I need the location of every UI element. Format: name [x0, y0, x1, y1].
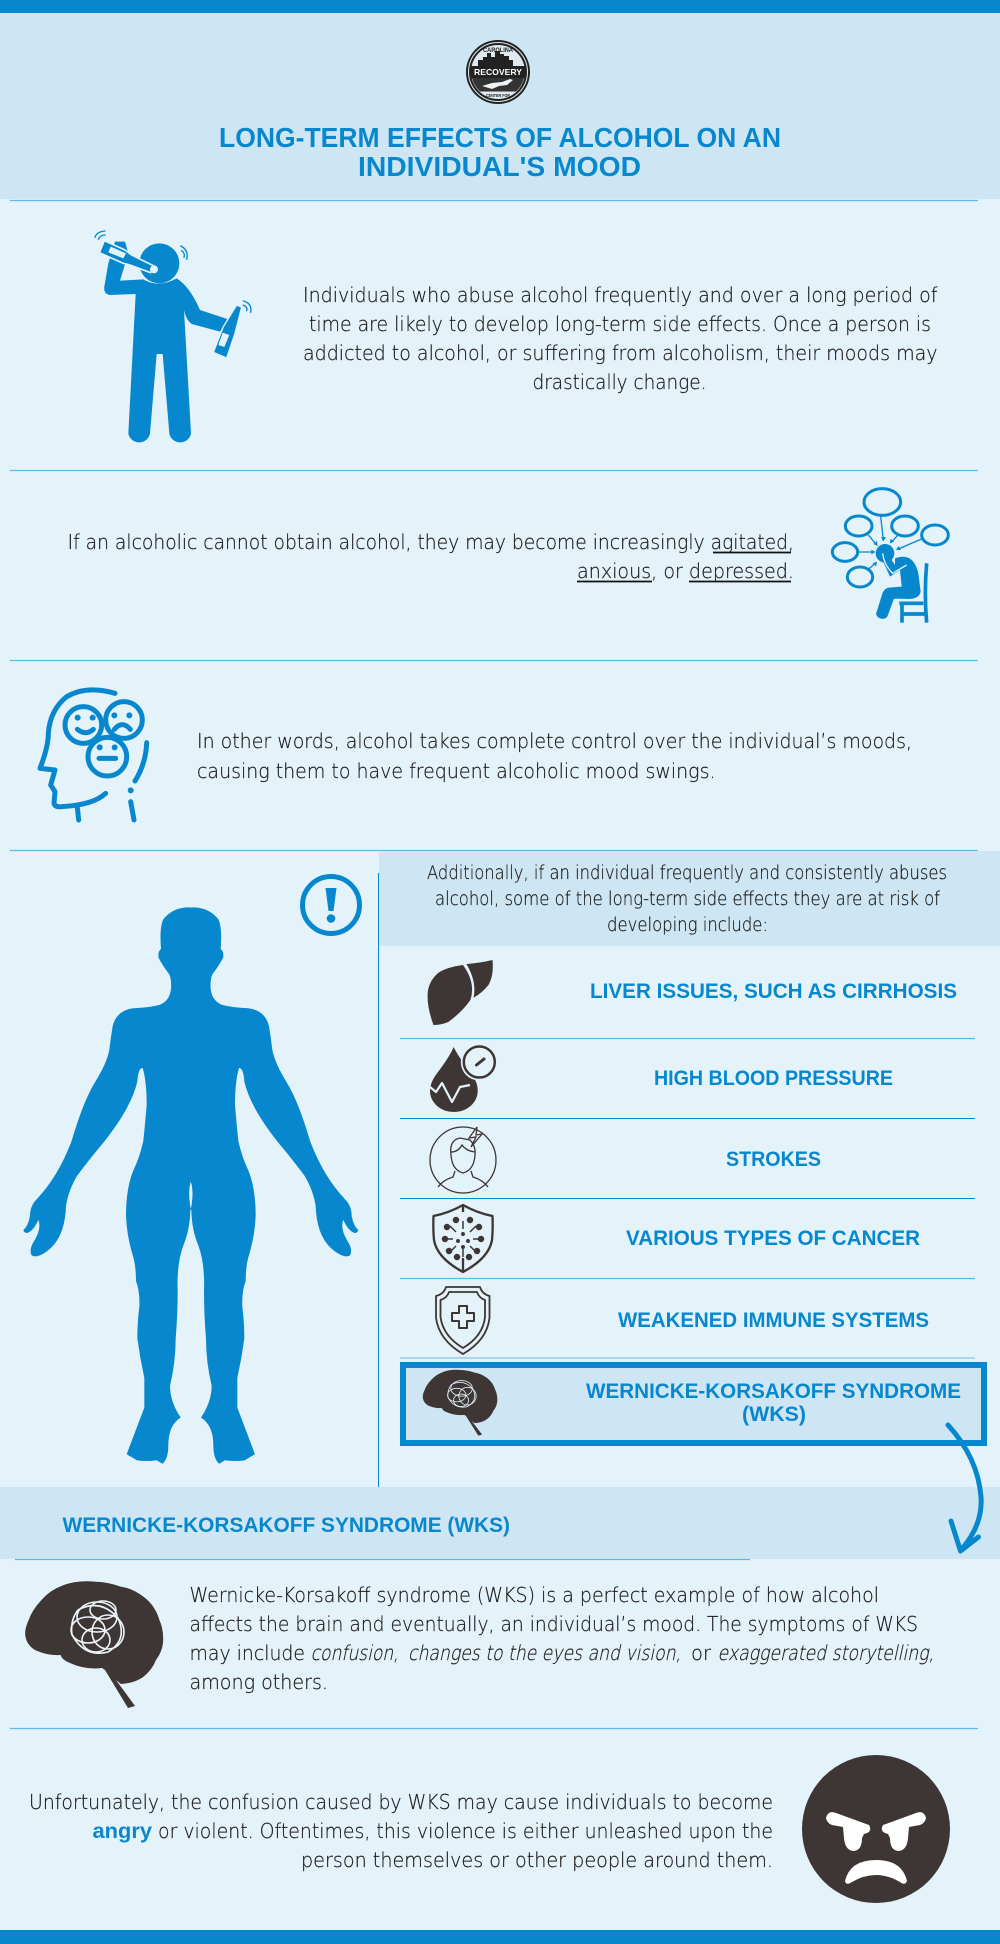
- icon: person drinking from bottles: [95, 231, 251, 442]
- icon: large brain with tangle: [25, 1581, 163, 1708]
- icon: blood drop with gauge: [430, 1044, 498, 1112]
- text: paragraph two: If an alcoholic cannot obtain alcohol, they may become increasingly agitated,: [68, 530, 794, 554]
- panel: risk intro: developing include:: [607, 915, 768, 936]
- text: anger and violence: [29, 1790, 773, 1872]
- text: paragraph one: drastically change.: [532, 370, 706, 394]
- row: Wernicke-Korsakoff highlight box: (WKS): [742, 1403, 806, 1426]
- icon: small brain: [423, 1370, 497, 1436]
- icon: person overwhelmed by thought bubbles: [832, 489, 948, 623]
- vertical divider: [378, 873, 380, 1487]
- title: LONG-TERM EFFECTS OF ALCOHOL ON AN: [219, 122, 781, 153]
- logo: Carolina Recovery Center: RECOVERY: [474, 67, 522, 77]
- header panel: [0, 13, 1000, 199]
- row: strokes: [430, 1127, 821, 1193]
- text: paragraph three: In other words, alcohol takes complete control over the individual’s moods,: [197, 729, 912, 753]
- icon: head with mood faces: [40, 690, 147, 820]
- row: liver issues: LIVER ISSUES, SUCH AS CIRRHOSIS: [590, 980, 957, 1003]
- text: paragraph one: addicted to alcohol, or suffering from alcoholism, their moods may: [303, 341, 938, 365]
- bottom bar: [0, 1930, 1000, 1944]
- text: WKS explanation: among others.: [190, 1670, 328, 1694]
- row: liver issues: [428, 960, 957, 1025]
- icon: head with lightning: [430, 1127, 496, 1193]
- logo: Carolina Recovery Center: CAROLINA: [483, 48, 514, 54]
- text: paragraph two: anxious, or depressed.: [577, 559, 794, 583]
- text: anger and violence: person themselves or other people around them.: [301, 1848, 773, 1872]
- icon: exclamation mark: [302, 876, 360, 934]
- panel: risk intro: [379, 851, 1000, 946]
- text: paragraph one: time are likely to develop long-term side effects. Once a person is: [309, 312, 931, 336]
- text: paragraph one: Individuals who abuse alcohol frequently and over a long period of: [303, 283, 938, 307]
- panel: WKS heading band: [0, 1487, 1000, 1559]
- text: WKS explanation: Wernicke-Korsakoff syndrome (WKS) is a perfect example of how alcohol: [190, 1583, 879, 1607]
- panel: risk intro: Additionally, if an individual frequently and consistently abuses: [427, 863, 947, 884]
- row: high blood pressure: [430, 1044, 893, 1112]
- logo: Carolina Recovery Center: [466, 40, 530, 104]
- human body silhouette: [23, 907, 358, 1464]
- text: paragraph two: [68, 530, 794, 583]
- text: anger and violence: or violent. Oftentimes, this violence is either unleashed upon the: [158, 1819, 773, 1843]
- text: WKS explanation: or: [691, 1641, 712, 1665]
- panel: risk intro: alcohol, some of the long-term side effects they are at risk of: [435, 889, 940, 910]
- text: paragraph one: [303, 283, 938, 394]
- logo: Carolina Recovery Center: CENTER FOR: [486, 93, 511, 98]
- text: paragraph three: causing them to have frequent alcoholic mood swings.: [197, 759, 716, 783]
- row: Wernicke-Korsakoff highlight box: WERNICKE-KORSAKOFF SYNDROME: [586, 1380, 961, 1403]
- row: strokes: STROKES: [726, 1148, 821, 1171]
- panel: WKS heading band: WERNICKE-KORSAKOFF SYNDROME (WKS): [62, 1514, 510, 1537]
- row: weakened immune systems: WEAKENED IMMUNE SYSTEMS: [618, 1309, 929, 1332]
- text: anger and violence: Unfortunately, the confusion caused by WKS may cause individuals to become: [29, 1790, 773, 1814]
- top bar: [0, 0, 1000, 13]
- text: WKS explanation: changes to the eyes and vision,: [407, 1641, 685, 1665]
- row: cancer: [433, 1205, 920, 1272]
- text: paragraph three: [197, 729, 912, 783]
- text: WKS explanation: [190, 1583, 938, 1694]
- text: WKS explanation: confusion,: [310, 1641, 403, 1665]
- row: cancer: VARIOUS TYPES OF CANCER: [626, 1227, 920, 1250]
- text: WKS explanation: affects the brain and eventually, an individual’s mood. The symptoms of WKS: [190, 1612, 918, 1636]
- text: WKS explanation: may include: [190, 1641, 305, 1665]
- icon: shield with cross: [436, 1287, 490, 1354]
- row: Wernicke-Korsakoff highlight box: [403, 1365, 984, 1443]
- arrow from highlight box to WKS heading: [948, 1425, 981, 1551]
- title: [219, 122, 781, 182]
- icon: shield with virus: [433, 1205, 493, 1272]
- icon: liver: [428, 960, 493, 1025]
- icon: angry face: [802, 1755, 950, 1903]
- text: anger and violence: angry: [92, 1820, 152, 1843]
- title: INDIVIDUAL'S MOOD: [358, 151, 641, 182]
- row: weakened immune systems: [436, 1287, 929, 1354]
- text: WKS explanation: exaggerated storytelling,: [716, 1641, 938, 1665]
- row: high blood pressure: HIGH BLOOD PRESSURE: [654, 1067, 893, 1090]
